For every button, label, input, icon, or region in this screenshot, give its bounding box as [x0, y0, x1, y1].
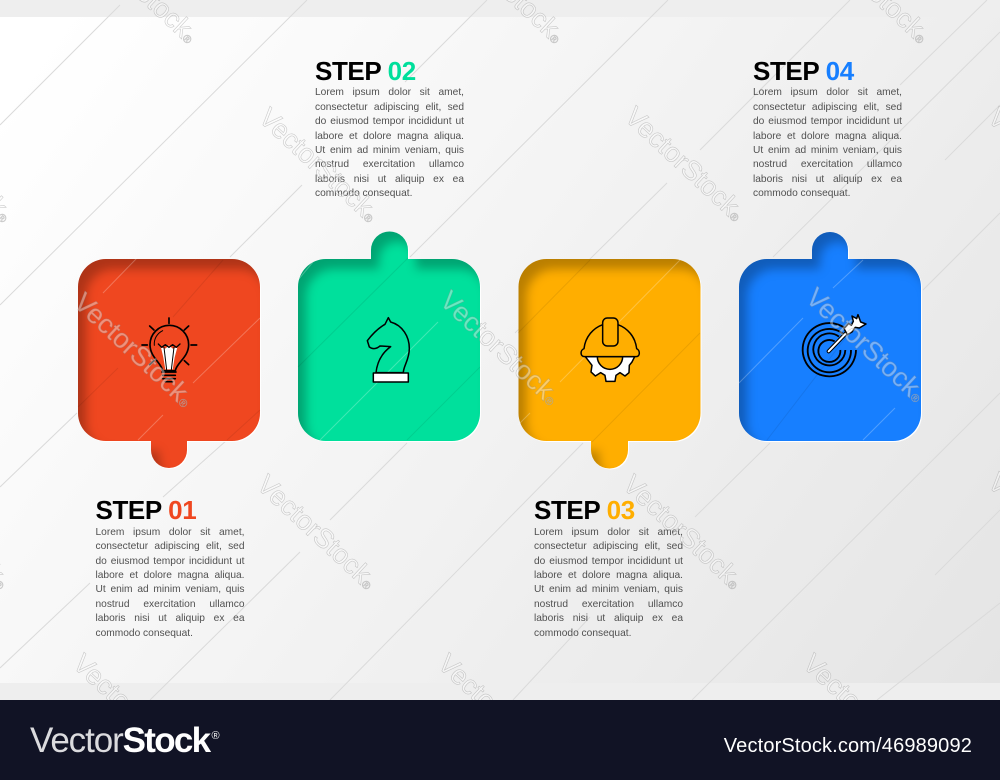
body text: step 04: nostrud exercitation ullamco: [753, 159, 902, 170]
card: step 03 yellow: [518, 259, 702, 469]
body text: step 02: commodo consequat.: [315, 188, 412, 199]
watermarks: VectorStock®: [797, 648, 929, 774]
body text: step 02: labore et dolore magna aliqua.: [315, 130, 464, 142]
body text: step 02: nostrud exercitation ullamco: [315, 159, 464, 170]
body text: step 02: Lorem ipsum dolor sit amet,: [315, 87, 464, 98]
body text: step 03: Ut enim ad minim veniam, quis: [534, 584, 683, 595]
body text: step 03: [534, 527, 684, 639]
footer bar: [0, 700, 1000, 780]
body text: step 04: laboris nisi ut aliquip ex ea: [753, 174, 902, 185]
watermarks: VectorStock®: [253, 102, 385, 228]
body text: step 04: commodo consequat.: [753, 188, 850, 199]
watermarks: VectorStock®: [68, 287, 200, 413]
footer url: VectorStock.com/46989092: [724, 735, 972, 757]
body text: step 04: Ut enim ad minim veniam, quis: [753, 145, 902, 156]
body text: step 01: commodo consequat.: [96, 628, 193, 639]
watermarks: VectorStock®: [800, 282, 932, 408]
icon: target with dart: [803, 315, 866, 376]
body text: step 01: do eiusmod tempor incididunt ut: [96, 556, 244, 567]
icon: hard hat with gear: [581, 318, 639, 381]
body text: step 03: do eiusmod tempor incididunt ut: [534, 556, 683, 567]
body text: step 04: consectetur adipiscing elit, sed: [753, 102, 902, 113]
card: step 02 green: [298, 232, 481, 442]
heading: step 01: STEP 01: [96, 495, 196, 525]
text block: step 02: [315, 56, 464, 199]
watermarks: VectorStock®: [251, 469, 383, 595]
text block: step 04: [753, 56, 902, 199]
body text: step 01: nostrud exercitation ullamco: [96, 599, 244, 610]
body text: step 02: laboris nisi ut aliquip ex ea: [315, 174, 464, 185]
icon: light bulb: [142, 318, 197, 382]
body text: step 03: labore et dolore magna aliqua.: [534, 570, 683, 581]
watermarks: VectorStock®: [617, 469, 749, 595]
text block: step 03: [534, 495, 684, 639]
body text: step 03: Lorem ipsum dolor sit amet,: [534, 527, 683, 538]
body text: step 01: [96, 527, 245, 639]
body text: step 04: do eiusmod tempor incididunt ut: [753, 116, 902, 127]
body text: step 03: nostrud exercitation ullamco: [534, 599, 683, 610]
text block: step 01: [96, 495, 245, 639]
body text: step 02: do eiusmod tempor incididunt ut: [315, 116, 464, 127]
body text: step 04: Lorem ipsum dolor sit amet,: [753, 87, 902, 98]
icon: chess knight: [367, 318, 409, 382]
heading: step 03: STEP 03: [534, 495, 635, 525]
body text: step 01: Lorem ipsum dolor sit amet,: [96, 527, 244, 538]
body text: step 03: consectetur adipiscing elit, sed: [534, 541, 683, 552]
watermarks: VectorStock®: [67, 648, 199, 774]
heading: step 04: STEP 04: [753, 56, 854, 86]
card: step 04 blue: [739, 232, 922, 442]
footer logo: VectorStock®: [30, 721, 220, 760]
body text: step 02: consectetur adipiscing elit, sed: [315, 102, 464, 113]
card: step 01 red: [78, 258, 261, 469]
body text: step 02: [315, 87, 464, 199]
body text: step 01: laboris nisi ut aliquip ex ea: [96, 613, 244, 624]
body text: step 01: consectetur adipiscing elit, sed: [96, 541, 244, 552]
body text: step 04: labore et dolore magna aliqua.: [753, 130, 902, 142]
watermarks: VectorStock®: [619, 101, 751, 227]
body text: step 02: Ut enim ad minim veniam, quis: [315, 145, 464, 156]
heading: step 02: STEP 02: [315, 56, 416, 86]
body text: step 01: labore et dolore magna aliqua.: [96, 570, 244, 581]
body text: step 01: Ut enim ad minim veniam, quis: [96, 584, 244, 595]
body text: step 03: laboris nisi ut aliquip ex ea: [534, 613, 683, 624]
body text: step 04: [753, 87, 902, 199]
watermarks: VectorStock®: [434, 285, 566, 411]
watermarks: VectorStock®: [432, 648, 564, 774]
body text: step 03: commodo consequat.: [534, 628, 631, 639]
